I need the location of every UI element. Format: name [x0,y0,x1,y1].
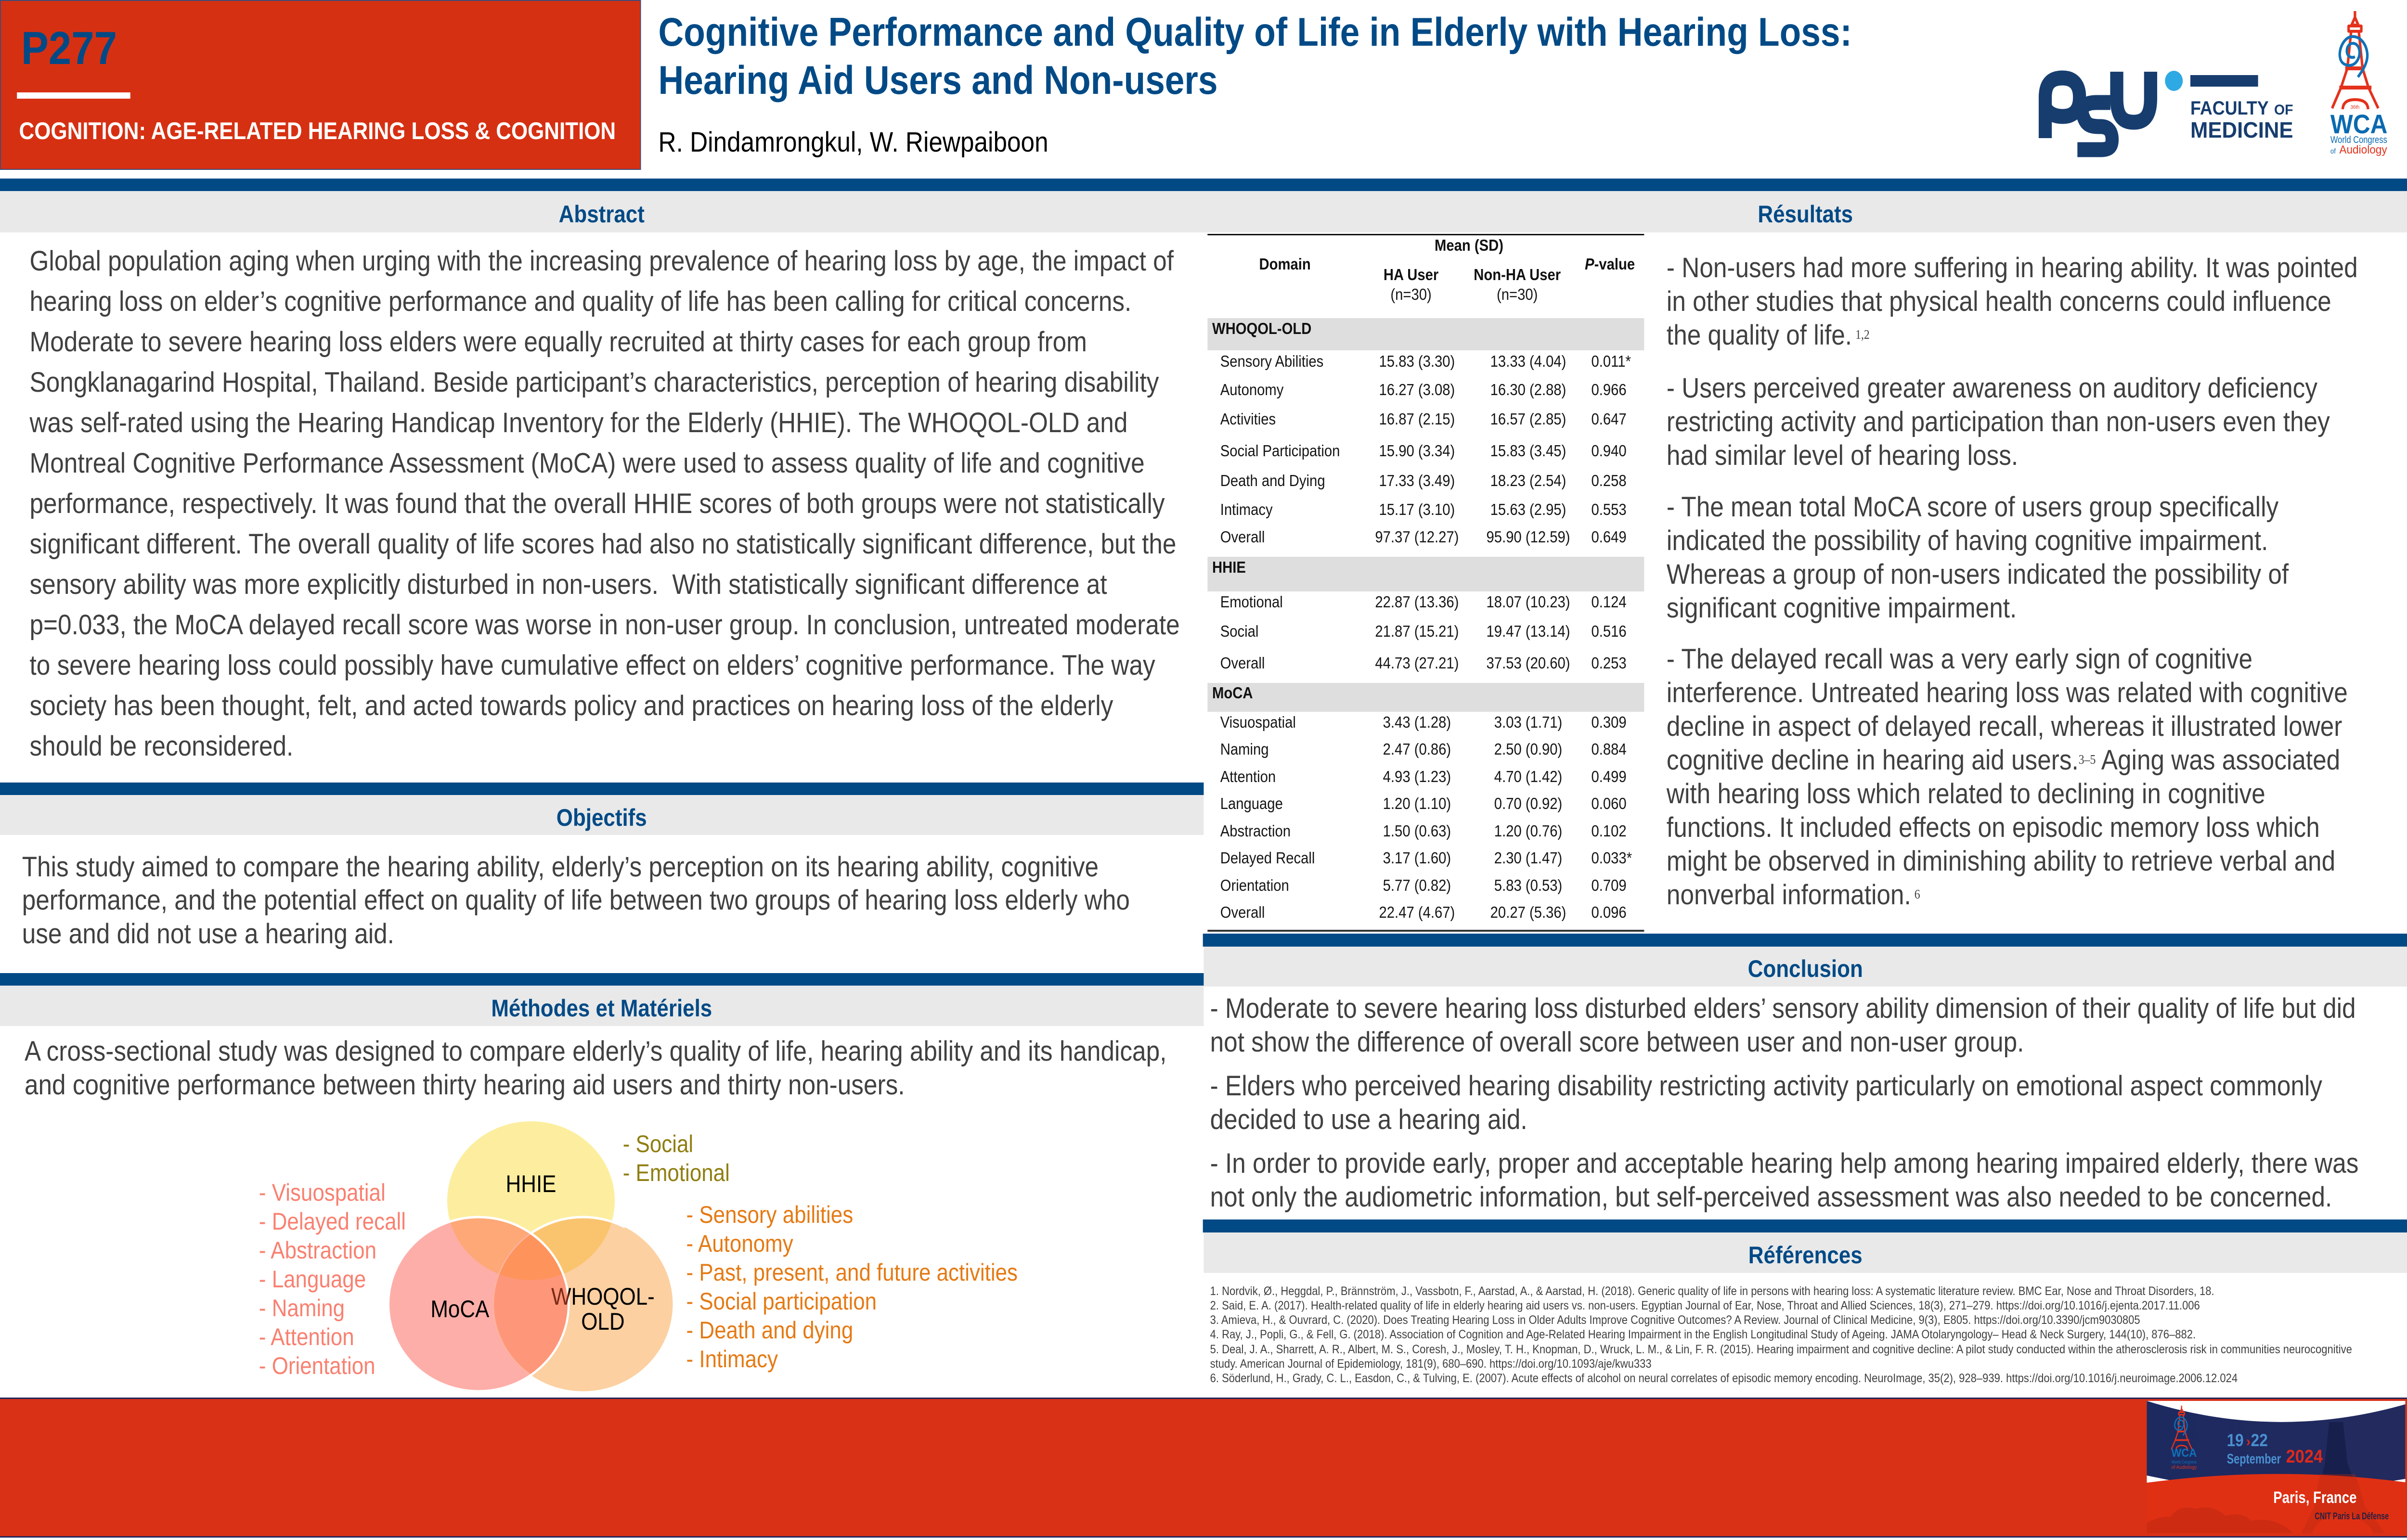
logo: PSU Faculty of Medicine: MEDICINE [2190,118,2293,143]
results text: functions. It included effects on episodic memory loss which [1667,811,2320,843]
row: Autonomy: 0.966 [1592,381,1627,398]
row: Autonomy: 16.27 (3.08) [1379,381,1455,398]
abstract text: p=0.033, the MoCA delayed recall score was worse in non-user group. In conclusion, untreated moderate [30,609,1180,641]
row: WHOQOL overall: Overall [1220,528,1265,546]
results text: - The delayed recall was a very early sign of cognitive [1667,643,2252,675]
results text: restricting activity and participation than non-users even they [1667,406,2330,437]
row: HHIE overall [1220,654,1627,672]
row: Social Participation: 15.90 (3.34) [1379,442,1455,460]
row: Orientation [1220,876,1627,894]
conclusion text: not show the difference of overall score between user and non-user group. [1210,1026,2024,1058]
row: Intimacy: 15.63 (2.95) [1490,500,1566,518]
row: WHOQOL overall: 95.90 (12.59) [1487,528,1570,546]
methods text: and cognitive performance between thirty hearing aid users and thirty non-users. [25,1069,905,1101]
results text: cognitive decline in hearing aid users. [1667,744,2079,776]
label: HHIE: HHIE [506,1170,556,1197]
table header: Non-HA User [1474,266,1561,283]
logo: World Congress of Audiology: World Congress [2330,134,2387,145]
abstract text: should be reconsidered. [30,730,293,762]
labels: WHOQOL-OLD domains: - Sensory abilities [686,1201,853,1228]
row: Attention: Attention [1220,768,1276,785]
abstract text: sensory ability was more explicitly disturbed in non-users. With statistically significant difference at [30,568,1107,600]
logo: World Congress of Audiology: 36th [2350,105,2360,110]
row: Orientation: 5.77 (0.82) [1383,876,1451,894]
white divider bar [17,92,130,99]
row: Attention [1220,768,1627,785]
panel: abstract [0,191,1204,762]
logo: PSU Faculty of Medicine: OF [2274,101,2293,117]
row: HHIE overall: Overall [1220,654,1265,672]
methods text: A cross-sectional study was designed to compare elderly’s quality of life, hearing ability and its handicap, [25,1035,1166,1067]
topic label: COGNITION: AGE-RELATED HEARING LOSS & COGNITION [19,117,616,144]
congress banner [2147,1401,2405,1533]
row: Social [1220,622,1627,640]
logo: World Congress of Audiology: WCA [2330,109,2388,140]
labels: HHIE domains [623,1130,730,1186]
row: Sensory Abilities: 15.83 (3.30) [1379,352,1455,370]
references list: 1. Nordvik, Ø., Heggdal, P., Brännström, J., Vassbotn, F., Aarstad, A., & Aarstad, H. (2018). Generic quality of life in persons with hearing loss: A systematic literature review. BMC Ear, Nose and Throat Disorders, 18. [1210,1284,2214,1297]
title: Cognitive Performance and Quality of Life in Elderly with Hearing Loss: [659,10,1852,54]
results text: with hearing loss which related to declining in cognitive [1666,778,2265,809]
row: Autonomy [1220,381,1627,398]
row: MoCA overall: 22.47 (4.67) [1379,903,1455,921]
row: Emotional: 18.07 (10.23) [1487,593,1570,611]
row: Language [1220,795,1627,812]
references list: 6. Söderlund, H., Grady, C. L., Easdon, C., & Tulving, E. (2007). Acute effects of alcohol on neural correlates of episodic memory encoding. NeuroImage, 35(2), 928–939. https://doi.org/10.1016/j.neuroimage.2006.12.024 [1210,1372,2238,1385]
conclusion text: - Moderate to severe hearing loss disturbed elders’ sensory ability dimension of their quality of life but did [1210,992,2356,1024]
results text: indicated the possibility of having cognitive impairment. [1667,525,2268,556]
title: Hearing Aid Users and Non-users [659,58,1217,103]
results text: 1,2 [1855,328,1870,342]
panel: methods and materials [0,973,1204,1396]
abstract text: Songklanagarind Hospital, Thailand. Beside participant’s characteristics, perception of hearing disability [30,366,1159,398]
dates: › [2246,1433,2251,1449]
logo: PSU Faculty of Medicine: FACULTY [2190,97,2269,118]
row: Visuospatial: 0.309 [1592,713,1627,731]
row: Sensory Abilities: Sensory Abilities [1220,352,1323,370]
row: Delayed Recall: Delayed Recall [1220,849,1315,867]
conclusion text: not only the audiometric information, but self-perceived assessment was also needed to be concerned. [1210,1181,2332,1213]
row: Activities: 0.647 [1592,410,1627,428]
references list: 3. Amieva, H., & Ouvrard, C. (2020). Does Treating Hearing Loss in Older Adults Improve Cognitive Outcomes? A Review. Journal of Clinical Medicine, 9(3), E805. https://doi.org/10.3390/jcm9030805 [1210,1313,2140,1326]
conclusion text [1210,992,2358,1213]
row: HHIE overall: 44.73 (27.21) [1375,654,1459,672]
results text: 3–5 [2079,753,2096,767]
row: Sensory Abilities: 0.011* [1592,352,1631,370]
results text: interference. Untreated hearing loss was related with cognitive [1667,677,2348,708]
row: Intimacy [1220,500,1627,518]
heading: references: Références [1748,1241,1863,1269]
row: Attention: 0.499 [1592,768,1627,785]
results text: - Non-users had more suffering in hearing ability. It was pointed [1667,252,2358,283]
mini congress logo: of Audiology [2171,1464,2197,1470]
mini congress logo: World Congress [2171,1460,2197,1464]
row: Visuospatial: Visuospatial [1220,713,1296,731]
row: WHOQOL overall [1220,528,1627,546]
labels: HHIE domains: - Social [623,1130,693,1157]
conclusion text: decided to use a hearing aid. [1210,1104,1527,1135]
table header [1259,236,1635,303]
row: Social: 0.516 [1592,622,1627,640]
row: Social Participation [1220,442,1627,460]
row: Visuospatial [1220,713,1627,731]
header red panel: poster code and topic [0,0,641,169]
objectives text: performance, and the potential effect on quality of life between two groups of hearing loss elderly who [22,884,1130,916]
row: Death and Dying: 18.23 (2.54) [1490,472,1566,489]
row: Social Participation: Social Participation [1220,442,1340,460]
objectives text [22,851,1130,950]
row: Social Participation: 15.83 (3.45) [1490,442,1566,460]
results text: 6 [1915,887,1920,901]
row: Social: 21.87 (15.21) [1375,622,1459,640]
row: Activities [1220,410,1627,428]
poster number: P277 [21,22,117,74]
heading: objectives: Objectifs [556,804,647,831]
logo: World Congress of Audiology [2330,11,2388,156]
section row: HHIE: HHIE [1212,558,1246,576]
top blue divider [0,179,2407,191]
dates: 22 [2251,1431,2268,1450]
mini congress logo [2171,1406,2197,1470]
methods text [25,1035,1166,1101]
row: Activities: 16.87 (2.15) [1379,410,1455,428]
row: Delayed Recall: 2.30 (1.47) [1494,849,1562,867]
title [659,10,1852,103]
logo: World Congress of Audiology: of [2330,147,2336,155]
results text: - Users perceived greater awareness on auditory deficiency [1667,372,2317,404]
row: Orientation: 5.83 (0.53) [1494,876,1562,894]
labels: MoCA domains: - Visuospatial [259,1179,386,1206]
venn diagram [259,1107,1018,1396]
dates: September [2227,1450,2281,1466]
row: WHOQOL overall: 0.649 [1592,528,1627,546]
dates: 19 [2227,1431,2244,1450]
results table [1207,234,1644,932]
objectives text: This study aimed to compare the hearing ability, elderly’s perception on its hearing ability, cognitive [22,851,1099,883]
row: Orientation: Orientation [1220,876,1289,894]
row: Sensory Abilities: 13.33 (4.04) [1490,352,1566,370]
abstract text: Moderate to severe hearing loss elders were equally recruited at thirty cases for each group from [30,326,1087,358]
section row: HHIE [1207,557,1644,591]
row: HHIE overall: 0.253 [1592,654,1627,672]
row: Language: 0.70 (0.92) [1494,795,1562,812]
heading: methods: Méthodes et Matériels [491,994,712,1022]
panel: conclusion [1203,934,2407,1213]
abstract text: hearing loss on elder’s cognitive performance and quality of life has been calling for critical concerns. [30,285,1131,317]
labels: MoCA domains: - Language [259,1265,366,1293]
results text: Whereas a group of non-users indicated the possibility of [1667,558,2289,590]
references list: 2. Said, E. A. (2017). Health-related quality of life in elderly hearing aid users vs. non-users. Egyptian Journal of Ear, Nose, Throat and Allied Sciences, 18(3), 271–279. https://doi.org/10.1016/j.ejenta.2017.11.006 [1210,1299,2200,1312]
labels: WHOQOL-OLD domains [686,1201,1018,1373]
row: Delayed Recall: 3.17 (1.60) [1383,849,1451,867]
row: Naming: 0.884 [1592,740,1627,758]
row: Intimacy: Intimacy [1220,500,1273,518]
label: MoCA: MoCA [430,1295,490,1322]
abstract text: to severe hearing loss could possibly have cumulative effect on elders’ cognitive performance. The way [30,649,1155,681]
labels: WHOQOL-OLD domains: - Past, present, and future activities [686,1258,1018,1286]
row: MoCA overall: Overall [1220,903,1265,921]
labels: WHOQOL-OLD domains: - Social participation [686,1287,877,1315]
row: MoCA overall: 20.27 (5.36) [1490,903,1566,921]
row: Death and Dying: 17.33 (3.49) [1379,472,1455,489]
row: Social Participation: 0.940 [1592,442,1627,460]
row: MoCA overall [1220,903,1627,921]
results text: nonverbal information. [1667,879,1911,911]
labels: MoCA domains: - Naming [259,1294,345,1322]
row: Abstraction: 1.20 (0.76) [1494,822,1562,840]
row: Intimacy: 0.553 [1592,500,1627,518]
row: Orientation: 0.709 [1592,876,1627,894]
section row: MoCA [1207,683,1644,712]
labels: WHOQOL-OLD domains: - Intimacy [686,1345,778,1373]
objectives text: use and did not use a hearing aid. [22,918,394,950]
row: Death and Dying [1220,472,1627,489]
row: Abstraction: 1.50 (0.63) [1383,822,1451,840]
abstract text: society has been thought, felt, and acted towards policy and practices on hearing loss of the elderly [30,690,1113,721]
row: Visuospatial: 3.43 (1.28) [1383,713,1451,731]
row: Visuospatial: 3.03 (1.71) [1494,713,1562,731]
row: Language: 0.060 [1592,795,1627,812]
row: Intimacy: 15.17 (3.10) [1379,500,1455,518]
results text: might be observed in diminishing ability to retrieve verbal and [1667,845,2335,877]
row: Naming: 2.50 (0.90) [1494,740,1562,758]
row: Attention: 4.70 (1.42) [1494,768,1562,785]
location [2273,1488,2389,1521]
references list: study. American Journal of Epidemiology, 181(9), 680–690. https://doi.org/10.1093/aje/kwu333 [1210,1357,1652,1370]
label: WHOQOL-OLD: WHOQOL- [551,1283,655,1310]
results text: in other studies that physical health concerns could influence [1667,285,2331,317]
abstract text: significant different. The overall quality of life scores had also no statistically significant difference, but the [30,528,1176,560]
row: Autonomy: Autonomy [1220,381,1284,398]
conclusion text: - Elders who perceived hearing disability restricting activity particularly on emotional aspect commonly [1210,1070,2322,1102]
table header: HA User [1384,266,1438,283]
row: WHOQOL overall: 97.37 (12.27) [1375,528,1459,546]
labels: WHOQOL-OLD domains: - Autonomy [686,1230,793,1257]
abstract text [29,245,1180,762]
labels: MoCA domains: - Delayed recall [259,1207,406,1235]
panel: objectives [0,783,1204,950]
row: Language: Language [1220,795,1283,812]
references list [1210,1284,2352,1385]
section row: WHOQOL-OLD: WHOQOL-OLD [1212,320,1311,337]
row: Death and Dying: Death and Dying [1220,472,1325,489]
row: Emotional [1220,593,1627,611]
row: Activities: Activities [1220,410,1276,428]
labels: MoCA domains: - Orientation [259,1352,375,1379]
dates [2227,1431,2323,1466]
row: Language: 1.20 (1.10) [1383,795,1451,812]
location: Paris, France [2273,1488,2356,1506]
logo: World Congress of Audiology: Audiology [2339,143,2387,156]
row: Naming [1220,740,1627,758]
abstract text: was self-rated using the Hearing Handicap Inventory for the Elderly (HHIE). The WHOQOL-OLD and [29,407,1127,438]
row: Sensory Abilities [1220,352,1631,370]
row: HHIE overall: 37.53 (20.60) [1487,654,1570,672]
row: Delayed Recall [1220,849,1632,867]
table header: P-value [1585,255,1635,273]
row: Social: 19.47 (13.14) [1487,622,1570,640]
row: Social: Social [1220,622,1258,640]
references list: 5. Deal, J. A., Sharrett, A. R., Albert, M. S., Coresh, J., Mosley, T. H., Knopman, D., Wruck, L. M., & Lin, F. R. (2015). Hearing impairment and cognitive decline: A pilot study conducted within the atherosclerosis risk in communities neurocognitive [1210,1343,2352,1356]
results text: Aging was associated [2096,744,2340,776]
table header: Mean (SD) [1435,236,1503,254]
row: Emotional: Emotional [1220,593,1283,611]
abstract text: Montreal Cognitive Performance Assessment (MoCA) were used to assess quality of life and cognitive [30,447,1145,479]
table header: (n=30) [1390,285,1432,303]
conclusion text: - In order to provide early, proper and acceptable hearing help among hearing impaired elderly, there was [1210,1147,2358,1179]
labels: WHOQOL-OLD domains: - Death and dying [686,1316,853,1344]
results text [1666,252,2358,911]
abstract text: performance, respectively. It was found that the overall HHIE scores of both groups were not statistically [30,488,1165,519]
heading: results: Résultats [1758,200,1853,228]
results text: significant cognitive impairment. [1667,592,2017,624]
row: Autonomy: 16.30 (2.88) [1490,381,1566,398]
heading: conclusion: Conclusion [1748,955,1863,982]
label: WHOQOL-OLD [551,1283,655,1335]
row: Abstraction [1220,822,1627,840]
section row: MoCA: MoCA [1212,684,1253,702]
authors: R. Dindamrongkul, W. Riewpaiboon [659,126,1048,158]
row: Emotional: 22.87 (13.36) [1375,593,1459,611]
table header: (n=30) [1497,285,1538,303]
row: Abstraction: Abstraction [1220,822,1291,840]
references list: 4. Ray, J., Popli, G., & Fell, G. (2018). Association of Cognition and Age-Related Hearing Impairment in the English Longitudinal Study of Ageing. JAMA Otolaryngology– Head & Neck Surgery, 144(10), 876–882. [1210,1328,2196,1341]
dates: 2024 [2286,1446,2323,1466]
results text: the quality of life. [1667,319,1852,351]
row: Naming: Naming [1220,740,1269,758]
row: Emotional: 0.124 [1592,593,1627,611]
labels: MoCA domains: - Abstraction [259,1236,376,1264]
logo: PSU Faculty of Medicine [2045,71,2293,150]
labels: HHIE domains: - Emotional [623,1159,730,1186]
results text: decline in aspect of delayed recall, whereas it illustrated lower [1667,710,2342,742]
row: Attention: 4.93 (1.23) [1383,768,1451,785]
mini congress logo: WCA [2171,1447,2197,1459]
results text: had similar level of hearing loss. [1667,439,2018,471]
row: Delayed Recall: 0.033* [1592,849,1632,867]
labels: MoCA domains: - Attention [259,1323,354,1350]
footer red band [0,1398,2407,1538]
label: WHOQOL-OLD: OLD [581,1308,625,1335]
row: Naming: 2.47 (0.86) [1383,740,1451,758]
section row: WHOQOL-OLD [1207,318,1644,350]
labels: MoCA domains [259,1179,406,1379]
panel: references [1203,1219,2407,1385]
row: MoCA overall: 0.096 [1592,903,1627,921]
row: Death and Dying: 0.258 [1592,472,1627,489]
heading: abstract: Abstract [559,200,645,228]
row: Activities: 16.57 (2.85) [1490,410,1566,428]
location: CNIT Paris La Défense [2315,1511,2389,1521]
table header: Domain [1259,255,1311,273]
results text: - The mean total MoCA score of users group specifically [1667,491,2279,523]
abstract text: Global population aging when urging with the increasing prevalence of hearing loss by age, the impact of [30,245,1174,277]
panel: results [1204,191,2407,932]
row: Abstraction: 0.102 [1592,822,1627,840]
